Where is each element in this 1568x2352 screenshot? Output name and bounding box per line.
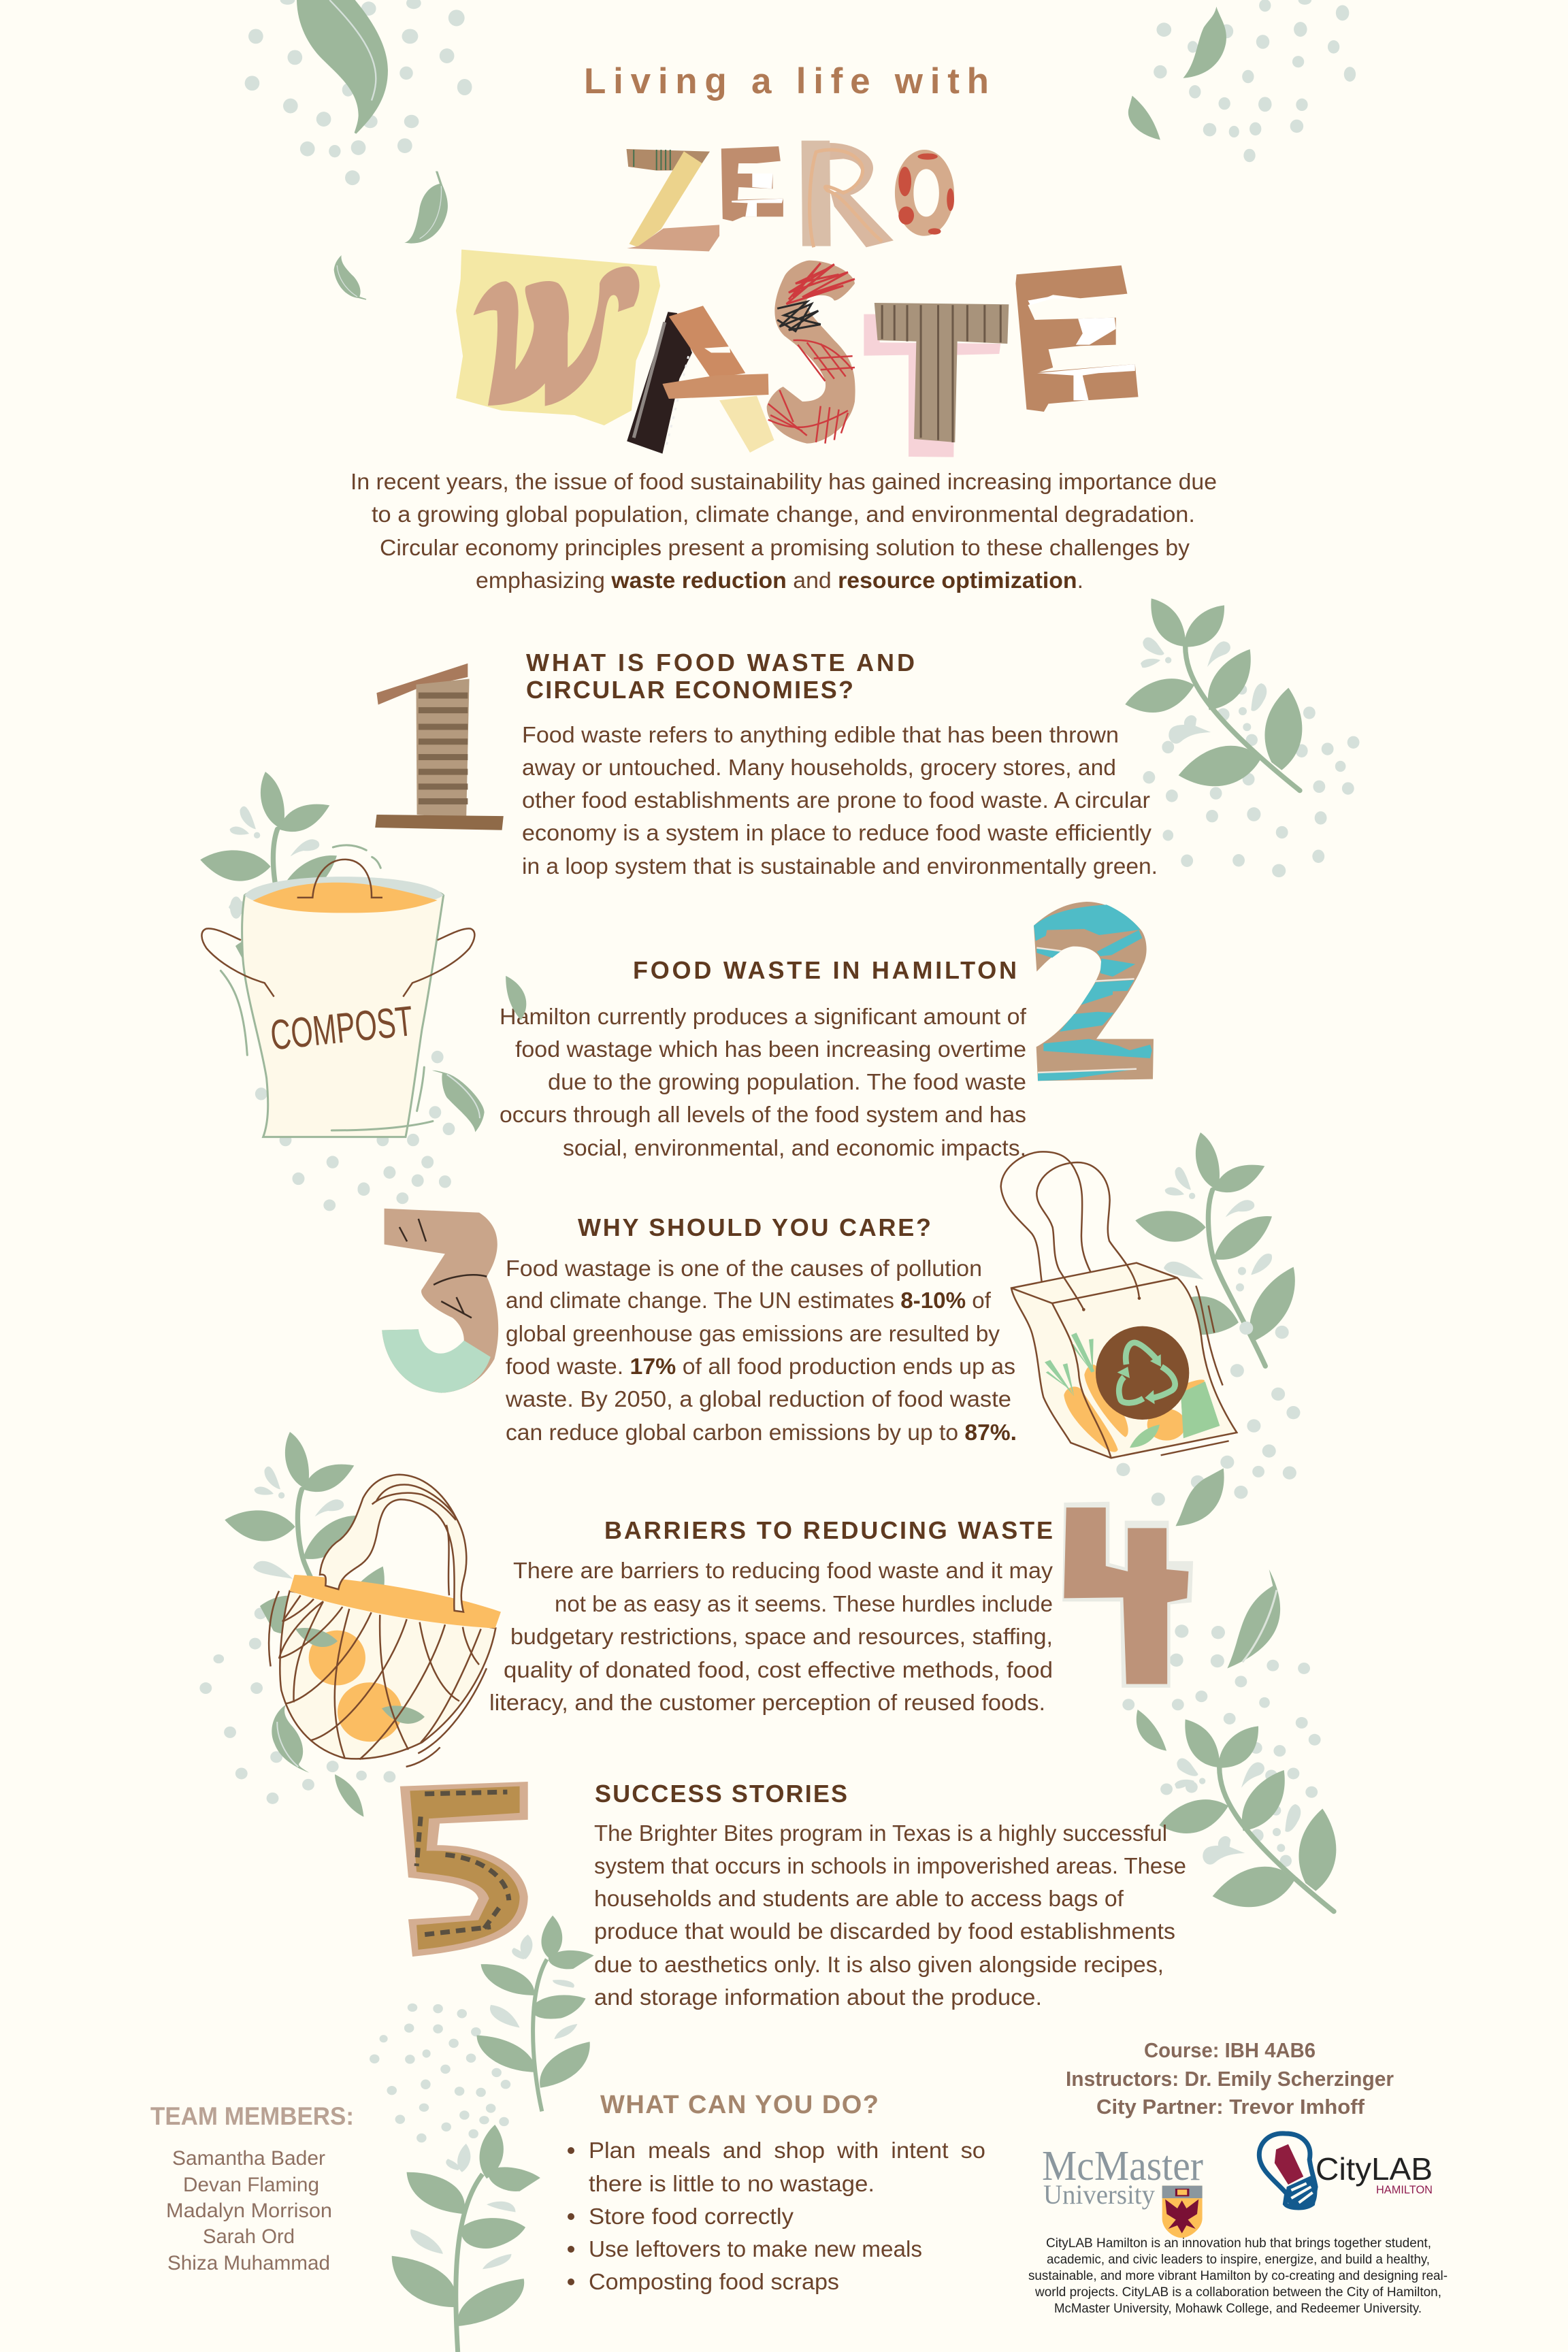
number 1 collage xyxy=(375,664,504,830)
body 4: quality of donated food, cost effective methods, food xyxy=(504,1657,1053,1682)
plant behind tote bag xyxy=(225,1432,385,1665)
body 4: There are barriers to reducing food waste and it may xyxy=(513,1558,1054,1583)
body 5: The Brighter Bites program in Texas is a highly successful xyxy=(594,1820,1167,1846)
section 1 xyxy=(375,649,1158,879)
heading 3: WHY SHOULD YOU CARE? xyxy=(578,1213,931,1241)
team heading: TEAM MEMBERS: xyxy=(150,2102,354,2130)
plant behind shopping bag xyxy=(1135,1132,1295,1366)
body 4: not be as easy as it seems. These hurdles include xyxy=(555,1591,1053,1616)
top decoration: dots xyxy=(245,0,1356,185)
body 1: in a loop system that is sustainable and environmentally green. xyxy=(522,853,1158,879)
leaf under tote xyxy=(272,1705,309,1773)
team names: Madalyn Morrison xyxy=(166,2200,332,2222)
title: ZERO collage letters xyxy=(627,141,954,251)
body 5: and storage information about the produce. xyxy=(594,1984,1042,2010)
course credits: Instructors: Dr. Emily Scherzinger xyxy=(1066,2067,1394,2091)
title: Living a life with: Living a life with xyxy=(584,61,989,101)
number 4 collage xyxy=(1062,1502,1193,1688)
plant upper xyxy=(477,1916,594,2111)
intro paragraph: emphasizing waste reduction and resource optimization . xyxy=(476,568,1083,593)
body 2 xyxy=(500,1004,1027,1160)
logo: McMaster University: McMaster xyxy=(1042,2143,1203,2189)
crest xyxy=(1162,2186,1203,2238)
body 2: Hamilton currently produces a significant amount of xyxy=(500,1004,1027,1029)
body 5: produce that would be discarded by food establishments xyxy=(594,1918,1175,1944)
intro paragraph: to a growing global population, climate change, and environmental degradation. xyxy=(372,502,1195,527)
section 2 xyxy=(500,902,1154,1160)
section 3 xyxy=(382,1209,1017,1445)
team names: Samantha Bader xyxy=(172,2147,325,2170)
CityLAB description: CityLAB Hamilton is an innovation hub that brings together student, xyxy=(1046,2236,1431,2251)
body 1: away or untouched. Many households, grocery stores, and xyxy=(522,755,1116,780)
body 3: and climate change. The UN estimates 8-10% of xyxy=(506,1288,992,1313)
heading 1: WHAT IS FOOD WASTE AND xyxy=(526,649,915,676)
bucket label: COMPOST xyxy=(268,998,415,1060)
course credits xyxy=(1066,2038,1394,2119)
course credits: City Partner: Trevor Imhoff xyxy=(1096,2095,1365,2119)
plant behind compost bucket xyxy=(200,772,360,1005)
leaf beside compost bucket xyxy=(432,1071,485,1132)
lower decoration: dots, vertical plants xyxy=(370,1916,594,2352)
decoration: dots and leaves, sections 3 and 4 xyxy=(199,1156,1321,1817)
body 4: budgetary restrictions, space and resources, staffing, xyxy=(510,1624,1053,1649)
body 5: due to aesthetics only. It is also given alongside recipes, xyxy=(594,1952,1164,1977)
body 5: system that occurs in schools in impoverished areas. These xyxy=(594,1853,1186,1878)
body 2: social, environmental, and economic impacts. xyxy=(563,1135,1026,1160)
CityLAB description xyxy=(1028,2236,1448,2316)
top-right leaves xyxy=(1128,7,1226,140)
body 2: due to the growing population. The food waste xyxy=(548,1069,1026,1094)
team members xyxy=(150,2102,354,2274)
action list: Plan meals and shop with intent so xyxy=(589,2138,985,2163)
heading 4: BARRIERS TO REDUCING WASTE xyxy=(604,1516,1053,1544)
intro paragraph: In recent years, the issue of food sustainability has gained increasing importance due xyxy=(350,469,1217,494)
what can you do xyxy=(568,2091,985,2294)
course credits: Course: IBH 4AB6 xyxy=(1144,2038,1316,2062)
body 3: can reduce global carbon emissions by up to 87%. xyxy=(506,1420,1017,1445)
number 3 collage xyxy=(382,1209,498,1393)
action list: Use leftovers to make new meals xyxy=(589,2236,922,2261)
section 4 xyxy=(489,1502,1193,1715)
title: WASTE collage letters xyxy=(456,250,1138,457)
body 4: literacy, and the customer perception of reused foods. xyxy=(489,1690,1045,1715)
logo: McMaster University: University xyxy=(1043,2179,1155,2210)
body 5 xyxy=(594,1820,1186,2010)
mesh tote bag illustration xyxy=(269,1475,501,1773)
number 2 collage xyxy=(1034,902,1154,1081)
team names: Sarah Ord xyxy=(203,2225,295,2248)
CityLAB description: world projects. CityLAB is a collaboration between the City of Hamilton, xyxy=(1034,2285,1441,2300)
body 3: Food wastage is one of the causes of pollution xyxy=(506,1256,982,1281)
heading: what can you do: WHAT CAN YOU DO? xyxy=(600,2091,879,2119)
action list: there is little to no wastage. xyxy=(589,2171,875,2196)
CityLAB description: academic, and civic leaders to inspire, energize, and build a healthy, xyxy=(1047,2253,1430,2267)
light bulb mark xyxy=(1259,2134,1317,2209)
decoration: plant top right of section 1 xyxy=(1125,598,1302,791)
section 5 xyxy=(400,1780,1186,2010)
CityLAB description: sustainable, and more vibrant Hamilton by co-creating and designing real- xyxy=(1028,2269,1448,2283)
logo: McMaster University xyxy=(1042,2143,1203,2238)
body 1: other food establishments are prone to food waste. A circular xyxy=(522,787,1150,813)
top-left leaves xyxy=(297,0,448,300)
body 3: waste. By 2050, a global reduction of food waste xyxy=(505,1386,1011,1411)
heading 1 xyxy=(526,649,915,704)
team names xyxy=(166,2147,332,2274)
heading 2: FOOD WASTE IN HAMILTON xyxy=(633,956,1017,984)
body 2: food wastage which has been increasing overtime xyxy=(515,1036,1026,1062)
body 3 xyxy=(505,1256,1017,1445)
number 5 collage xyxy=(400,1782,528,1957)
plant lower xyxy=(392,2125,540,2352)
body 1: Food waste refers to anything edible that has been thrown xyxy=(522,722,1119,747)
heading 1: CIRCULAR ECONOMIES? xyxy=(526,676,853,704)
intro paragraph xyxy=(350,469,1217,593)
logo: CityLAB Hamilton xyxy=(1259,2134,1433,2209)
plant right of section 5 xyxy=(1159,1719,1336,1912)
heading 5: SUCCESS STORIES xyxy=(595,1780,847,1808)
body 4 xyxy=(489,1558,1054,1715)
body 3: food waste. 17% of all food production ends up as xyxy=(506,1354,1015,1379)
team names: Shiza Muhammad xyxy=(167,2252,330,2274)
CityLAB description: McMaster University, Mohawk College, and Redeemer University. xyxy=(1054,2302,1422,2316)
action list: Composting food scraps xyxy=(589,2269,839,2294)
compost bucket illustration xyxy=(201,845,474,1137)
action list: Store food correctly xyxy=(589,2204,794,2229)
body 1 xyxy=(522,722,1158,879)
body 1: economy is a system in place to reduce food waste efficiently xyxy=(522,820,1152,845)
logo: CityLAB Hamilton: CityLAB xyxy=(1316,2151,1433,2187)
recycling badge xyxy=(1096,1326,1189,1420)
decoration: dots around sections 1 and 2 xyxy=(230,706,1360,1195)
small leaf over text xyxy=(506,976,526,1020)
team names: Devan Flaming xyxy=(183,2174,319,2196)
body 3: global greenhouse gas emissions are resulted by xyxy=(506,1321,1000,1346)
body 2: occurs through all levels of the food system and has xyxy=(500,1102,1026,1127)
intro paragraph: Circular economy principles present a promising solution to these challenges by xyxy=(380,535,1190,560)
logo: CityLAB Hamilton: HAMILTON xyxy=(1376,2183,1433,2196)
body 5: households and students are able to access bags of xyxy=(594,1886,1124,1911)
shopping bag with recycling icon xyxy=(1001,1152,1237,1458)
action list xyxy=(568,2138,985,2294)
